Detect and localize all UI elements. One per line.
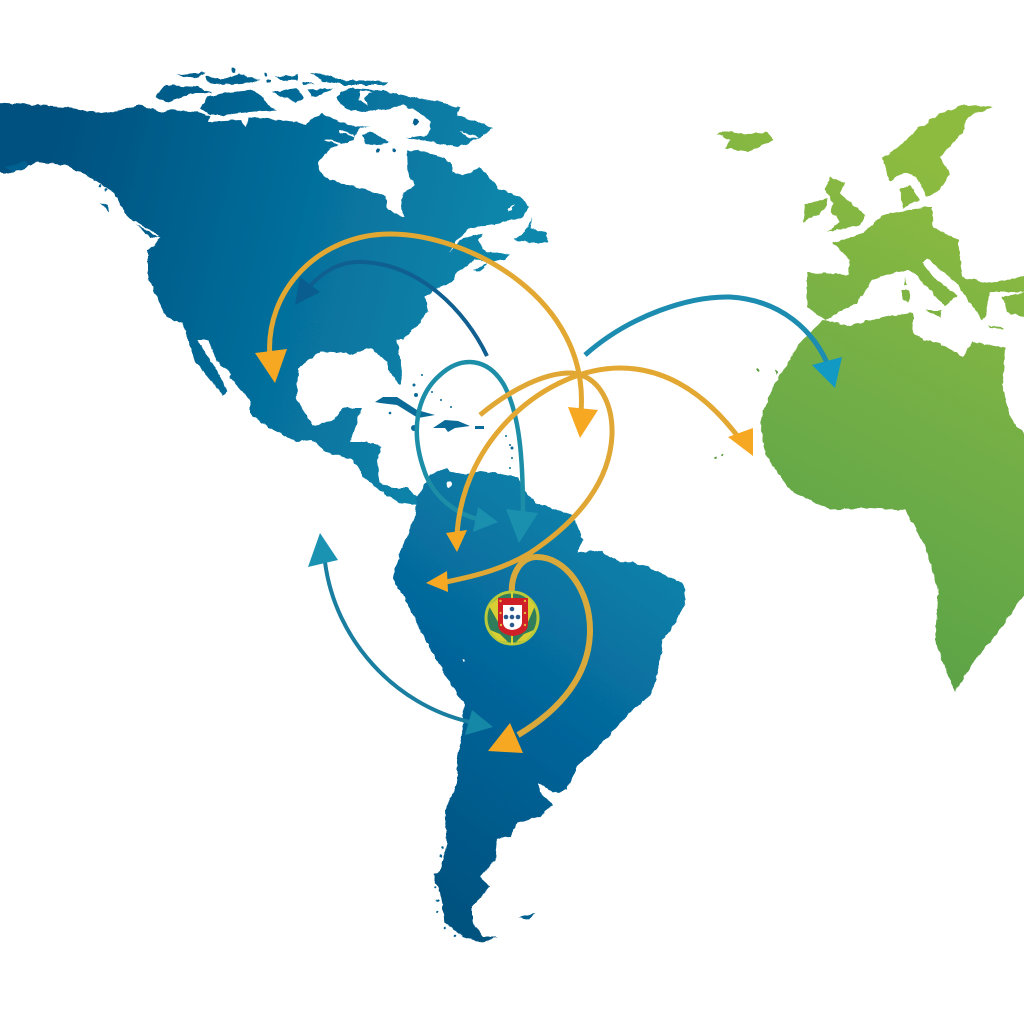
arrow: dark blue arc over North America [295,262,487,356]
arrow: orange from badge to southern Brazil [488,557,590,753]
arrow: two-way teal arc off the Pacific coast [308,533,493,735]
arrow: orange loop to western South America [426,373,612,592]
North America landmass [0,68,548,505]
Africa landmass [714,313,1024,692]
Caribbean islands [375,374,514,474]
arrow: teal arc to Africa [585,297,842,388]
arrow: orange arc from North America [255,234,598,438]
Europe landmass [717,105,1024,329]
arrow: teal loop over Caribbean [417,362,538,543]
South America landmass [393,468,686,943]
arrow: orange arc from Amazon to West Africa [446,368,753,552]
icon: Portuguese coat of arms badge [486,592,538,645]
